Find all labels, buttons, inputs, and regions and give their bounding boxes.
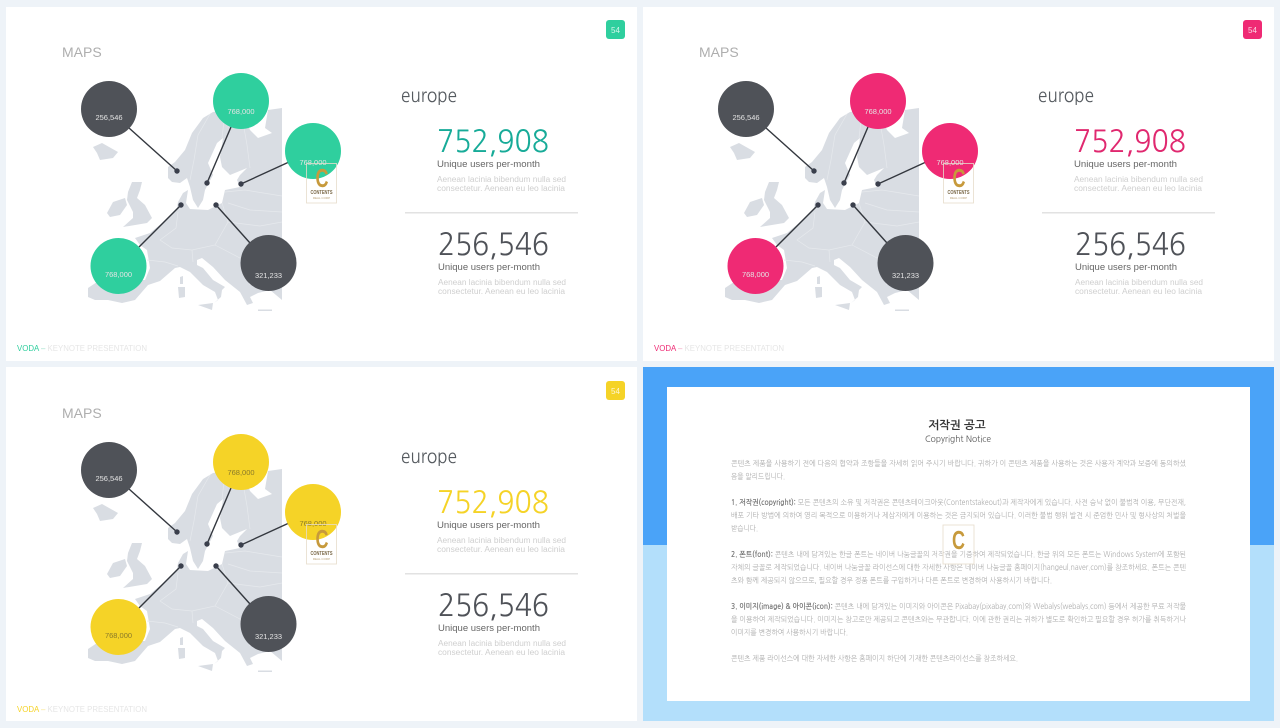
notice intro bbox=[731, 459, 1187, 481]
bubble: 321,233: 321,233 bbox=[892, 271, 919, 280]
stat: 752,908 bbox=[1074, 126, 1203, 193]
bubble: 321,233 bbox=[240, 596, 296, 652]
notice section 1: 배포 기타 방법에 의하여 영리 목적으로 이용하거나 제삼자에게 이용하는 것은 금지되어 있습니다. 이러한 불법 행위 발견 시 준엄한 민사 및 형사상의 처벌을 bbox=[731, 511, 1186, 520]
watermark logo bbox=[944, 163, 974, 203]
notice section 3: 이미지를 변경하여 사용하시기 바랍니다. bbox=[731, 628, 848, 637]
watermark logo: C bbox=[316, 163, 329, 193]
page number badge: 54 bbox=[611, 387, 620, 396]
notice subtitle: Copyright Notice bbox=[925, 435, 991, 444]
stat: 752,908: 752,908 bbox=[437, 487, 549, 518]
bubble: 256,546 bbox=[81, 81, 137, 137]
panel: yellow slide bbox=[6, 367, 637, 721]
bubble: right 768,000: 768,000 bbox=[299, 519, 327, 528]
connector lines bbox=[129, 488, 289, 608]
footer: VODA – KEYNOTE PRESENTATION bbox=[17, 705, 147, 714]
bubble: 256,546: 256,546 bbox=[95, 474, 123, 483]
bubble: left 768,000 bbox=[90, 238, 146, 294]
bubble: right 768,000 bbox=[922, 123, 978, 179]
heading: europe: europe bbox=[401, 86, 457, 105]
stat: 752,908: consectetur. Aenean eu leo lacinia bbox=[437, 545, 566, 554]
stat: 256,546: 256,546 bbox=[1075, 229, 1186, 260]
bubble: right 768,000 bbox=[285, 484, 341, 540]
panel: green slide bbox=[6, 7, 637, 361]
stat: 752,908: Unique users per-month bbox=[437, 520, 540, 530]
stat: 752,908: Aenean lacinia bibendum nulla sed bbox=[1074, 175, 1203, 184]
notice section 3: 3. 이미지(image) & 아이콘(icon): 콘텐츠 내에 담겨있는 이미지와 아이콘은 Pixabay(pixabay.com)와 Webalys(webalys.com) 등에서 제공한 무료 저작물 bbox=[731, 602, 1186, 611]
watermark logo: C bbox=[952, 163, 966, 193]
stat: 256,546: Unique users per-month bbox=[438, 262, 540, 272]
page number badge bbox=[1243, 20, 1262, 39]
bubble: left 768,000 bbox=[728, 238, 784, 294]
bubble: 321,233: 321,233 bbox=[255, 632, 282, 641]
marker dots bbox=[174, 529, 244, 569]
stat: 752,908: 752,908 bbox=[1074, 126, 1186, 157]
heading: europe: europe bbox=[401, 447, 457, 466]
stat: 256,546: Aenean lacinia bibendum nulla sed bbox=[438, 639, 566, 648]
stat: 256,546 bbox=[438, 229, 566, 296]
stat: 256,546: Aenean lacinia bibendum nulla sed bbox=[1075, 278, 1203, 287]
notice intro: 콘텐츠 제품을 사용하기 전에 다음의 협약과 조항들을 자세히 읽어 주시기 바랍니다. 귀하가 이 콘텐츠 제품을 사용하는 것은 사용자 계약과 보증에 동의하셨 bbox=[731, 459, 1187, 468]
heading: maps: MAPS bbox=[62, 44, 102, 60]
notice section 2: 2. 폰트(font): 콘텐츠 내에 담겨있는 한글 폰트는 네이버 나눔글꼴의 저작권을 기증하여 제작되었습니다. 한글 위의 모든 폰트는 Windows System에 포함된 bbox=[731, 550, 1186, 559]
marker dots bbox=[811, 168, 881, 208]
marker dots bbox=[174, 168, 244, 208]
stat: 256,546: consectetur. Aenean eu leo lacinia bbox=[438, 648, 566, 657]
watermark logo: CONTENTS bbox=[310, 551, 333, 557]
bubble: right 768,000 bbox=[285, 123, 341, 179]
panel: pink slide bbox=[643, 7, 1274, 361]
stat: 256,546 bbox=[438, 590, 566, 657]
heading: europe: europe bbox=[1038, 86, 1094, 105]
map of europe bbox=[725, 108, 919, 311]
page number badge: 54 bbox=[1248, 26, 1257, 35]
bubble: left 768,000: 768,000 bbox=[105, 631, 132, 640]
stat: 256,546: 256,546 bbox=[438, 229, 549, 260]
bubble: 256,546 bbox=[81, 442, 137, 498]
bubble: top 768,000: 768,000 bbox=[227, 107, 255, 116]
stat: 752,908: consectetur. Aenean eu leo lacinia bbox=[437, 184, 566, 193]
watermark logo bbox=[306, 524, 336, 564]
watermark logo: CONTENTS bbox=[310, 190, 333, 196]
notice title: 저작권 공고 bbox=[928, 419, 986, 431]
notice intro: 음을 알리드립니다. bbox=[731, 472, 785, 481]
bubble: 321,233 bbox=[240, 235, 296, 291]
heading: maps: MAPS bbox=[699, 44, 739, 60]
stat: 752,908: Unique users per-month bbox=[437, 159, 540, 169]
stat: 256,546: Unique users per-month bbox=[438, 623, 540, 633]
stat: 752,908: 752,908 bbox=[437, 126, 549, 157]
panel: copyright notice bbox=[643, 367, 1274, 721]
map of europe bbox=[88, 108, 282, 311]
heading: maps: MAPS bbox=[62, 405, 102, 421]
stat: 752,908: Unique users per-month bbox=[1074, 159, 1177, 169]
notice section 3 bbox=[731, 602, 1187, 637]
watermark logo: REAL CORP bbox=[950, 196, 967, 200]
page number badge bbox=[606, 20, 625, 39]
stat: 256,546: Aenean lacinia bibendum nulla sed bbox=[438, 278, 566, 287]
stat: 752,908: Aenean lacinia bibendum nulla sed bbox=[437, 536, 566, 545]
watermark logo: REAL CORP bbox=[313, 196, 330, 200]
notice section 2 bbox=[731, 550, 1186, 585]
watermark logo: CONTENTS bbox=[948, 190, 970, 196]
bubble: top 768,000 bbox=[850, 73, 906, 129]
page number badge: 54 bbox=[611, 26, 620, 35]
watermark logo: C bbox=[316, 524, 329, 554]
bubble: 321,233: 321,233 bbox=[255, 271, 282, 280]
watermark logo bbox=[943, 525, 974, 564]
notice section 2: 자체의 글꼴로 제작되었습니다. 네이버 나눔글꼴 라이선스에 대한 자세한 사항은 네이버 나눔글꼴 홈페이지(hangeul.naver.com)를 참조하세요. 폰트는 콘텐 bbox=[731, 563, 1186, 572]
bubble: left 768,000: 768,000 bbox=[105, 270, 132, 279]
bubble: right 768,000: 768,000 bbox=[299, 158, 327, 167]
bubble: left 768,000 bbox=[90, 599, 146, 655]
bubble: 256,546 bbox=[718, 81, 774, 137]
notice section 1: 받습니다. bbox=[731, 524, 758, 533]
stat: 752,908: consectetur. Aenean eu leo lacinia bbox=[1074, 184, 1203, 193]
bubble: top 768,000: 768,000 bbox=[864, 107, 892, 116]
stat: 256,546: consectetur. Aenean eu leo lacinia bbox=[438, 287, 566, 296]
bubble: top 768,000 bbox=[213, 73, 269, 129]
notice section 1 bbox=[731, 498, 1186, 533]
stat: 256,546: consectetur. Aenean eu leo lacinia bbox=[1075, 287, 1203, 296]
stat: 256,546 bbox=[1075, 229, 1203, 296]
page number badge bbox=[606, 381, 625, 400]
stat: 752,908 bbox=[437, 126, 566, 193]
footer: VODA – KEYNOTE PRESENTATION bbox=[17, 344, 147, 353]
stat: 256,546: 256,546 bbox=[438, 590, 549, 621]
watermark logo bbox=[306, 163, 336, 203]
notice section 1: 1. 저작권(copyright): 모든 콘텐츠의 소유 및 저작권은 콘텐츠테이크아웃(Contentstakeout)과 제작자에게 있습니다. 사전 승낙 없이 불법적 이용, 무단전재, bbox=[731, 498, 1186, 507]
bubble: top 768,000 bbox=[213, 434, 269, 490]
map of europe bbox=[88, 469, 282, 672]
watermark logo: C bbox=[952, 525, 965, 555]
notice closing line: 콘텐츠 제품 라이선스에 대한 자세한 사항은 홈페이지 하단에 기재한 콘텐츠라이선스를 참조하세요. bbox=[731, 654, 1018, 663]
bubble: 321,233 bbox=[878, 235, 934, 291]
stat: 256,546: Unique users per-month bbox=[1075, 262, 1177, 272]
notice section 3: 을 이용하여 제작되었습니다. 이미지는 참고로만 제공되고 콘텐츠와는 무관합니다. 이에 관한 권리는 귀하가 별도로 확인하고 필요할 경우 허가를 취득하거나 bbox=[731, 615, 1187, 624]
bubble: 256,546: 256,546 bbox=[95, 113, 123, 122]
bubble: right 768,000: 768,000 bbox=[936, 158, 964, 167]
bubble: 256,546: 256,546 bbox=[732, 113, 760, 122]
stat: 752,908 bbox=[437, 487, 566, 554]
footer: VODA – KEYNOTE PRESENTATION bbox=[654, 344, 784, 353]
connector lines bbox=[129, 127, 289, 247]
connector lines bbox=[766, 127, 926, 247]
watermark logo: REAL CORP bbox=[313, 557, 330, 561]
bubble: top 768,000: 768,000 bbox=[227, 468, 255, 477]
stat: 752,908: Aenean lacinia bibendum nulla sed bbox=[437, 175, 566, 184]
bubble: left 768,000: 768,000 bbox=[742, 270, 769, 279]
notice section 2: 츠와 함께 제공되지 않으므로, 필요할 경우 정품 폰트를 구입하거나 다른 폰트로 변경하여 사용하시기 바랍니다. bbox=[731, 576, 1052, 585]
